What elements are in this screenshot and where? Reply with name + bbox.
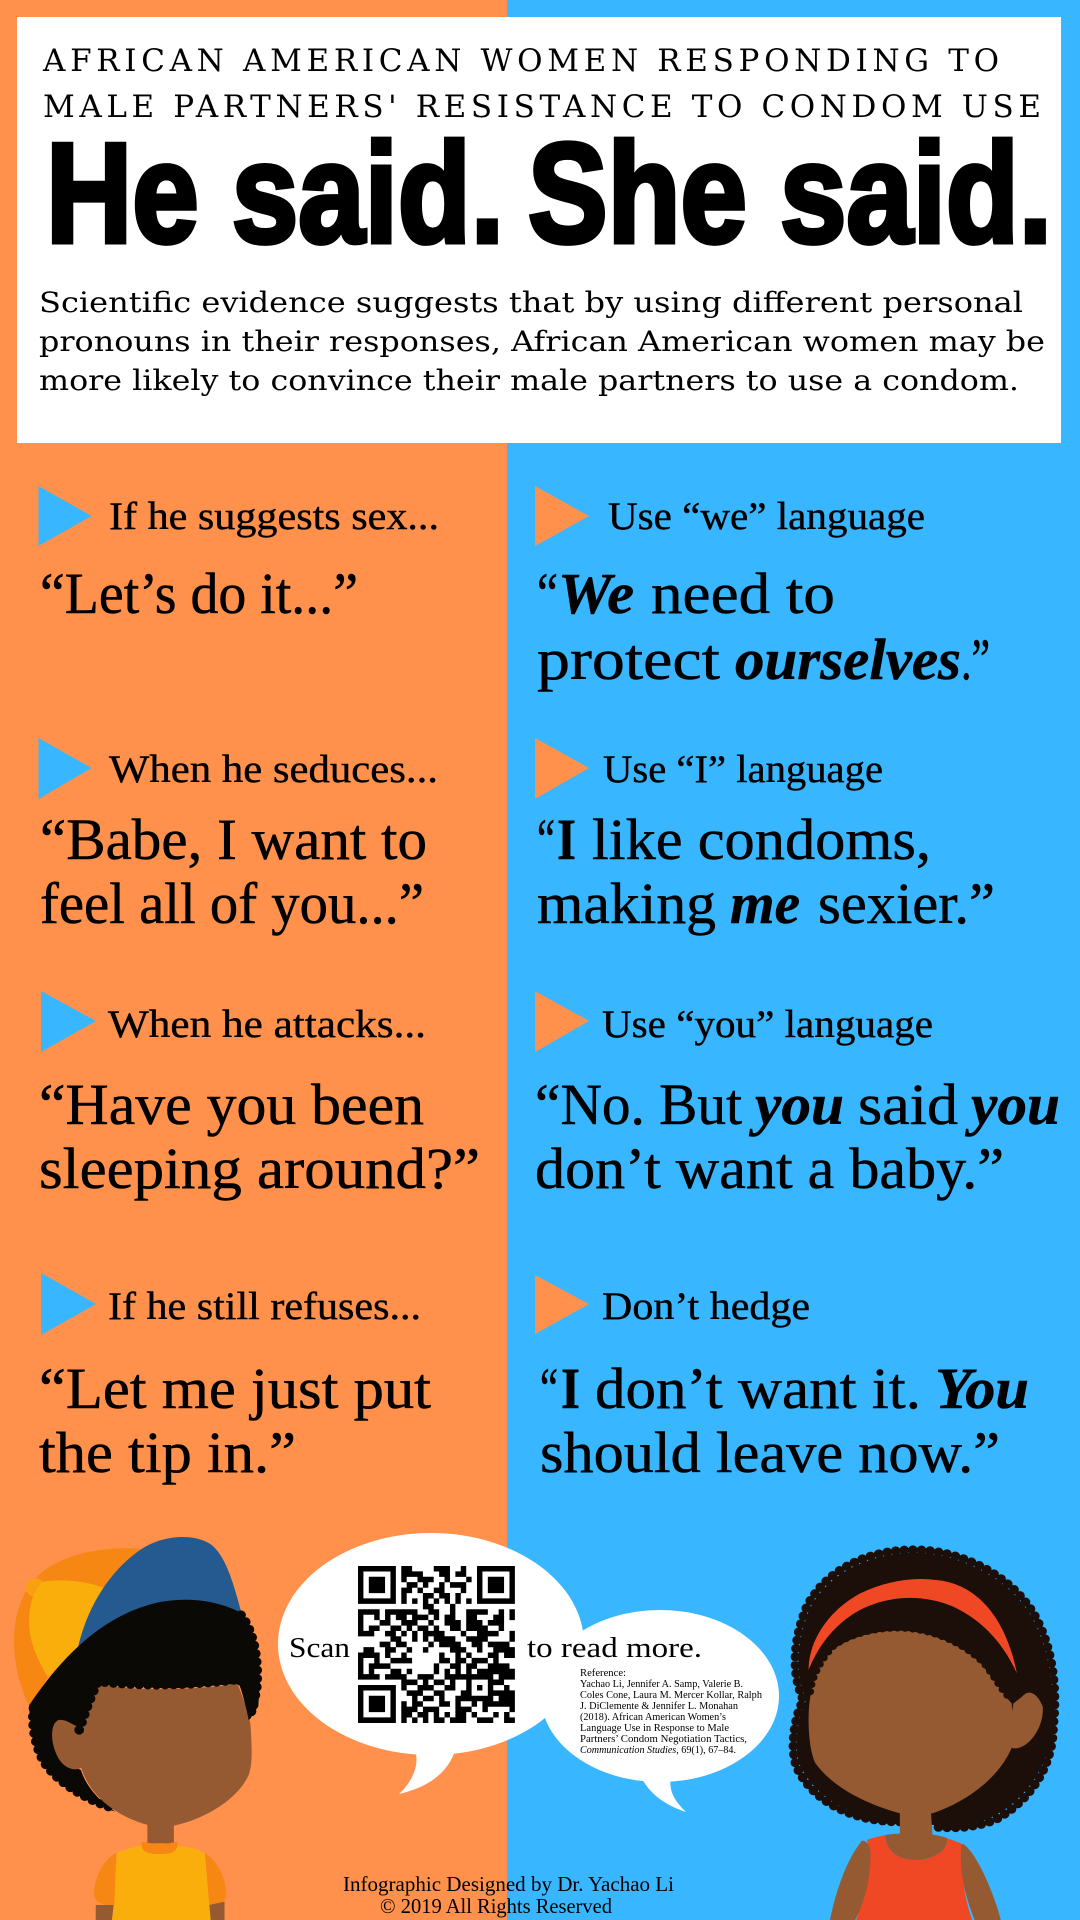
subtitle xyxy=(42,43,1041,125)
arrow xyxy=(38,738,92,799)
reference citation: Reference: xyxy=(580,1667,626,1679)
text: scan: Scan xyxy=(289,1632,351,1664)
row 1 right: we language xyxy=(535,486,990,692)
quote: don’t want a baby.” xyxy=(535,1136,1004,1201)
quote: ourselves xyxy=(735,627,961,692)
arrow xyxy=(38,486,92,546)
quote: “Have you been xyxy=(39,1072,424,1137)
quote: “Let’s do it...” xyxy=(40,561,358,626)
label: If he still refuses... xyxy=(108,1285,421,1328)
quote: like condoms, xyxy=(592,807,931,872)
row 3 right: you language xyxy=(535,991,1060,1201)
reference citation: Communication Studies, 69(1), 67–84. xyxy=(580,1744,736,1756)
reference citation: Yachao Li, Jennifer A. Samp, Valerie B. xyxy=(580,1678,743,1690)
reference citation: Language Use in Response to Male xyxy=(580,1722,729,1734)
row 4 right: don't hedge xyxy=(535,1275,1029,1485)
reference citation: Partners’ Condom Negotiation Tactics, xyxy=(580,1733,747,1745)
quote: sexier.” xyxy=(818,871,995,936)
label: If he suggests sex... xyxy=(109,495,439,538)
footer credit: Infographic Designed by Dr. Yachao Li xyxy=(343,1872,674,1896)
subtitle: MALE PARTNERS' RESISTANCE TO CONDOM USE xyxy=(43,89,1041,125)
reference citation: J. DiClemente & Jennifer L. Monahan xyxy=(580,1700,738,1712)
quote: need to xyxy=(651,561,835,626)
quote: protect xyxy=(537,627,720,692)
intro text: Scientific evidence suggests that by using different personal xyxy=(39,286,1023,319)
quote: should leave now.” xyxy=(540,1420,1000,1485)
row 2 right: I language xyxy=(535,738,995,936)
quote: me xyxy=(730,871,800,936)
quote: you xyxy=(965,1072,1060,1137)
intro text xyxy=(39,286,1045,397)
quote: We xyxy=(558,561,634,626)
arrow xyxy=(535,991,589,1052)
quote: the tip in.” xyxy=(39,1420,296,1485)
quote xyxy=(535,1072,1060,1201)
intro text: pronouns in their responses, African American women may be xyxy=(39,325,1045,358)
quote: said xyxy=(858,1072,958,1137)
QR code xyxy=(358,1569,515,1720)
label: When he attacks... xyxy=(108,1003,426,1046)
title xyxy=(46,114,1052,273)
row 3 left: he attacks xyxy=(39,991,480,1201)
quote: You xyxy=(935,1356,1029,1421)
quote: “ xyxy=(537,807,555,872)
quote xyxy=(39,1072,480,1201)
reference citation: Coles Cone, Laura M. Mercer Kollar, Ralph xyxy=(580,1689,762,1701)
label: Don’t hedge xyxy=(602,1285,810,1328)
icon: boy character xyxy=(14,1537,260,1920)
icon: girl character xyxy=(793,1550,1055,1920)
quote: I xyxy=(561,1356,580,1421)
speech bubble: reference xyxy=(541,1610,779,1812)
arrow xyxy=(41,1273,96,1335)
label: Use “I” language xyxy=(603,748,883,791)
row 2 left: he seduces xyxy=(38,738,438,936)
quote: you xyxy=(749,1072,844,1137)
label: Use “we” language xyxy=(608,495,925,538)
quote: “No. But xyxy=(535,1072,742,1137)
label: Use “you” language xyxy=(602,1003,933,1046)
subtitle: AFRICAN AMERICAN WOMEN RESPONDING TO xyxy=(42,43,999,79)
quote xyxy=(537,807,995,936)
reference citation xyxy=(580,1667,762,1756)
quote xyxy=(540,1356,1029,1485)
arrow xyxy=(535,486,589,546)
quote xyxy=(39,1356,431,1485)
footer credit: © 2019 All Rights Reserved xyxy=(380,1894,612,1918)
quote: sleeping around?” xyxy=(39,1136,480,1201)
arrow xyxy=(535,738,589,799)
title: He said. xyxy=(46,114,504,273)
quote xyxy=(537,561,990,692)
row 1 left: he suggests sex xyxy=(38,486,439,626)
reference citation: (2018). African American Women’s xyxy=(580,1711,726,1723)
label: When he seduces... xyxy=(109,748,438,791)
quote: I xyxy=(557,807,576,872)
quote: “Let me just put xyxy=(39,1356,431,1421)
panel: header xyxy=(17,17,1061,443)
quote: don’t want it. xyxy=(595,1356,921,1421)
arrow xyxy=(535,1275,589,1334)
intro text: more likely to convince their male partners to use a condom. xyxy=(39,364,1019,397)
quote: “ xyxy=(540,1356,558,1421)
quote: .” xyxy=(961,627,990,692)
arrow xyxy=(41,991,96,1052)
quote: making xyxy=(537,871,716,936)
quote: feel all of you...” xyxy=(40,871,424,936)
quote: “ xyxy=(537,561,558,626)
footer credit xyxy=(343,1872,674,1918)
speech bubble: QR scan xyxy=(278,1533,584,1794)
text: to read more: to read more. xyxy=(527,1632,702,1664)
quote: “Babe, I want to xyxy=(40,807,427,872)
row 4 left: he still refuses xyxy=(39,1273,431,1485)
quote xyxy=(40,807,427,936)
